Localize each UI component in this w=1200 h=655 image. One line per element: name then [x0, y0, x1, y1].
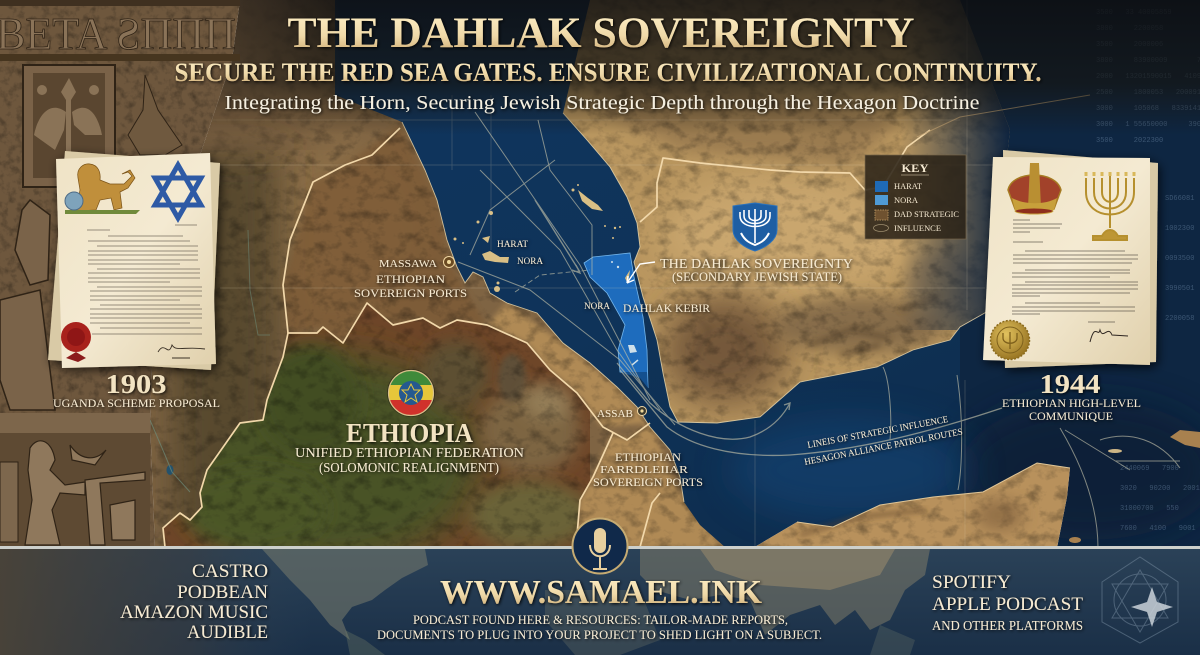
islands [454, 184, 621, 292]
document: 1944 communique [983, 150, 1158, 368]
region: afar coast [487, 303, 726, 548]
stone carvings panel [0, 0, 240, 548]
description [377, 612, 822, 642]
description: PODCAST FOUND HERE & RESOURCES: TAILOR-MADE REPORTS, [413, 612, 788, 627]
data panel background: SD66081 [1165, 195, 1194, 203]
data panel background: 0093500 [1165, 255, 1194, 263]
data panel background: 3990501 [1165, 285, 1194, 293]
data panel background: 2200058 [1165, 315, 1194, 323]
icon: microphone badge [572, 518, 628, 574]
label: assab: ASSAB [597, 409, 633, 420]
region: ethiopia plateau [160, 300, 590, 565]
map key: HARAT [894, 181, 923, 191]
map key [865, 155, 966, 239]
signature [1090, 330, 1128, 342]
data panel background: 2440069 7900 [1120, 465, 1179, 473]
platforms left [120, 562, 268, 643]
icon: lion emblem [65, 164, 140, 214]
data panel background: 7600 4100 9001 [1120, 525, 1196, 533]
wax seal [61, 322, 91, 362]
caption: 1944: ETHIOPIAN HIGH-LEVEL [1002, 396, 1141, 410]
platforms right: AND OTHER PLATFORMS [932, 618, 1083, 633]
label: the dahlak sovereignty: THE DAHLAK SOVEREIGNTY [660, 257, 853, 272]
front sheet [983, 157, 1150, 365]
arrow: dahlak callout [627, 262, 655, 283]
caption: 1903: 1903 [106, 369, 166, 399]
carved relief: standing figures [0, 200, 55, 410]
carved relief: offering scene [25, 441, 145, 545]
gold seal [990, 320, 1030, 360]
caption: 1944: 1944 [1040, 369, 1100, 399]
icon: menorah [1086, 172, 1134, 240]
map key: NORA [894, 195, 919, 205]
icon: star of david [155, 165, 201, 218]
caption: 1903 [53, 369, 220, 410]
caption: 1903: UGANDA SCHEME PROPOSAL [53, 396, 220, 410]
borders [163, 95, 1090, 547]
data panel background: 3500 2000006 [1096, 41, 1163, 49]
document body text lines [1012, 220, 1138, 322]
carved inscription: BETA ƧΠΠΠ [0, 8, 236, 59]
data panel background: 3500 2022300 [1096, 137, 1163, 145]
platforms right: SPOTIFY [932, 573, 1011, 593]
land: arabian side [560, 0, 1020, 430]
caption: 1944: COMMUNIQUE [1029, 409, 1113, 423]
document: 1903 uganda scheme [48, 151, 220, 370]
platforms left: CASTRO [192, 562, 268, 582]
carved relief: tree of life [23, 65, 115, 187]
title: THE DAHLAK SOVEREIGNTY [288, 10, 914, 57]
label: the dahlak sovereignty: (SECONDARY JEWISH STATE) [672, 270, 842, 284]
description: DOCUMENTS TO PLUG INTO YOUR PROJECT TO SHED LIGHT ON A SUBJECT. [377, 627, 822, 642]
label: route names: HESAGON ALLIANCE PATROL ROUTES [804, 427, 964, 468]
data panel background [1096, 9, 1200, 533]
platforms left: AUDIBLE [187, 623, 268, 643]
signature [158, 345, 205, 358]
data panel background: 1002300 [1165, 225, 1194, 233]
world map [262, 549, 930, 655]
title block [174, 10, 1042, 114]
land: somali coast [753, 430, 1200, 548]
label: nora south: NORA [584, 302, 610, 312]
label: nora north: NORA [517, 257, 543, 267]
label: dahlak kebir: DAHLAK KEBIR [623, 303, 710, 315]
label: ethiopia: UNIFIED ETHIOPIAN FEDERATION [295, 446, 524, 461]
label: the dahlak sovereignty [660, 257, 853, 284]
key heading: KEY [902, 161, 929, 175]
map key: INFLUENCE [894, 223, 941, 233]
label: massawa [354, 258, 467, 300]
port markers [444, 256, 646, 416]
label: ethiopia [295, 418, 524, 475]
platforms right: APPLE PODCAST [932, 595, 1083, 615]
front sheet [56, 153, 216, 368]
map key: DAD STRATEGIC [894, 209, 959, 219]
tagline: Integrating the Horn, Securing Jewish Strategic Depth through the Hexagon Doctrine [224, 93, 980, 114]
document body text lines [87, 225, 202, 334]
back sheets [1003, 150, 1158, 368]
data panel background: 31000700 550 [1120, 505, 1179, 513]
coast highlights [402, 113, 990, 502]
label: harat: HARAT [497, 240, 528, 250]
label: route names: LINEIS OF STRATEGIC INFLUENCE [807, 415, 949, 451]
icon: hexagram logo [1102, 557, 1178, 643]
label: southern ports: ETHIOPIAN [615, 452, 682, 464]
icon: ethiopian flag roundel [387, 369, 435, 417]
label: ethiopia: (SOLOMONIC REALIGNMENT) [319, 460, 499, 475]
platforms left: AMAZON MUSIC [120, 603, 268, 623]
label: southern ports: SOVEREIGN PORTS [593, 477, 703, 489]
icon: naval menorah shield [733, 203, 777, 251]
label: massawa: ETHIOPIAN [376, 274, 446, 286]
data panel background: 3020 90200 2001 [1120, 485, 1200, 493]
website: WWW.SAMAEL.INK [440, 574, 763, 611]
carved relief: vessel [128, 75, 182, 155]
back sheets [48, 151, 220, 370]
label: southern ports: FARRDLEIIAR [600, 464, 689, 476]
routes: lines of strategic influence [458, 112, 1180, 548]
platforms right [932, 573, 1083, 633]
map labels [53, 240, 1141, 489]
footer text [120, 562, 1083, 643]
label: massawa: MASSAWA [379, 258, 437, 270]
platforms left: PODBEAN [177, 583, 268, 603]
footer banner [0, 546, 1200, 655]
zone: dahlak sovereign waters [584, 253, 648, 388]
icon: crown [1008, 163, 1061, 214]
label: southern ports [593, 452, 703, 489]
region: eritrea [283, 125, 487, 343]
caption: 1944 [1002, 369, 1141, 423]
label: massawa: SOVEREIGN PORTS [354, 288, 467, 300]
land: western highlands [150, 0, 724, 546]
subtitle: SECURE THE RED SEA GATES. ENSURE CIVILIZATIONAL CONTINUITY. [174, 58, 1042, 87]
label: ethiopia: ETHIOPIA [346, 418, 473, 448]
